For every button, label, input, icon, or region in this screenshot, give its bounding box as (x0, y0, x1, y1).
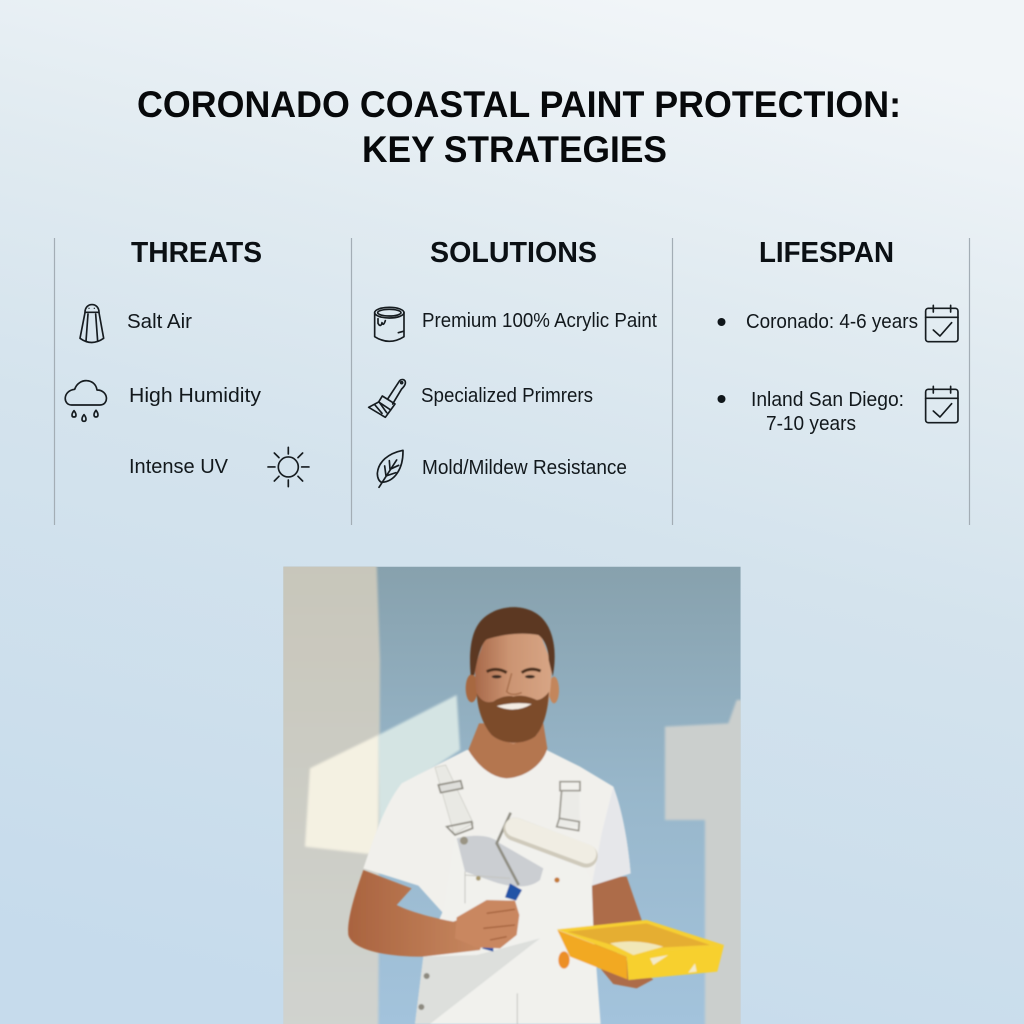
face (475, 633, 552, 744)
icon: leaf (377, 450, 403, 487)
icon: calendar check (926, 305, 958, 342)
icon: paint can (375, 307, 404, 341)
icon: salt shaker (80, 305, 104, 342)
panel: solutions (369, 237, 657, 487)
text: premium acrylic paint: Premium 100% Acrylic Paint (422, 310, 657, 332)
beard (477, 692, 549, 743)
icon: calendar check (926, 386, 958, 423)
text: salt air: Salt Air (127, 311, 192, 333)
bullet: coronado (718, 318, 726, 326)
panel: threats (65, 237, 309, 487)
hand (455, 900, 519, 948)
text: mold mildew resistance: Mold/Mildew Resistance (422, 457, 627, 479)
heading: threats: THREATS (131, 237, 262, 269)
roller frame (497, 813, 519, 885)
roller handle (505, 883, 522, 901)
text: specialized primrers: Specialized Primrers (421, 385, 593, 407)
icon: rain cloud (65, 381, 106, 421)
text: inland san diego lifespan: Inland San Diego: (751, 389, 904, 411)
heading: lifespan: LIFESPAN (759, 237, 894, 269)
bullet: inland (718, 395, 726, 403)
overalls (426, 886, 602, 1024)
text: coronado lifespan: Coronado: 4-6 years (746, 311, 918, 333)
title: CORONADO COASTAL PAINT PROTECTION: (137, 84, 901, 125)
icon: paint brush (369, 380, 405, 417)
text: intense uv: Intense UV (129, 456, 229, 478)
icon: sun (268, 447, 309, 487)
forearm (348, 870, 493, 957)
shirt (363, 750, 631, 927)
text: inland san diego lifespan: 7-10 years (766, 413, 856, 435)
roller cover (515, 829, 586, 856)
hair (470, 607, 555, 677)
title: KEY STRATEGIES (362, 129, 667, 170)
heading: solutions: SOLUTIONS (430, 237, 597, 269)
photo: painter holding roller and tray (280, 563, 744, 1024)
panel: lifespan (718, 237, 958, 435)
text: inland san diego lifespan (751, 389, 904, 435)
tray (557, 920, 724, 957)
text: high humidity: High Humidity (129, 385, 261, 407)
neck (468, 723, 547, 778)
right arm and supporting hand (592, 877, 653, 988)
title (137, 84, 901, 170)
